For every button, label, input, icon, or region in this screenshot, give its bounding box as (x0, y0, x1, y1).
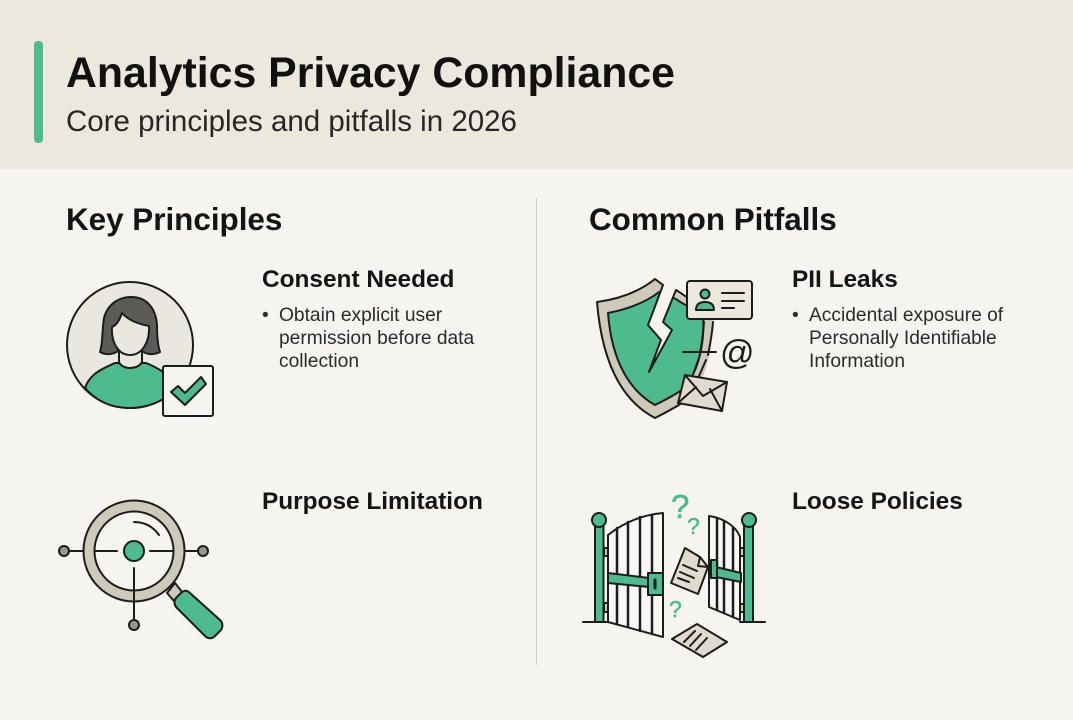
icon: broken shield with leaking data: @ (720, 334, 755, 372)
bullet text: consent: Obtain explicit user (279, 305, 442, 326)
bullet text: consent: • (262, 305, 269, 326)
title: Analytics Privacy Compliance (66, 49, 675, 97)
heading: loose policies: Loose Policies (792, 488, 963, 515)
bullet text: consent (262, 305, 474, 372)
icon: broken shield with leaking data (597, 279, 755, 418)
principle: consent needed (262, 266, 474, 372)
heading: common pitfalls: Common Pitfalls (589, 202, 837, 237)
bullet text: PII: Accidental exposure of (809, 305, 1003, 326)
heading: key principles: Key Principles (66, 202, 282, 237)
bullet text: PII: • (792, 305, 799, 326)
icon: open gate with questions and papers: ? (687, 513, 700, 539)
bullet text: consent: permission before data (279, 328, 474, 349)
header band (0, 0, 1073, 169)
heading: purpose limitation: Purpose Limitation (262, 488, 483, 515)
bullet text: PII: Personally Identifiable (809, 328, 997, 349)
icon: person with consent check (67, 282, 213, 416)
bullet text: consent: collection (279, 351, 359, 372)
subtitle: Core principles and pitfalls in 2026 (66, 105, 517, 138)
icon: open gate with questions and papers: ? (669, 596, 682, 622)
pitfall: PII leaks (792, 266, 1004, 372)
heading: consent needed: Consent Needed (262, 266, 454, 293)
bullet text: PII: Information (809, 351, 905, 372)
accent bar (34, 41, 43, 143)
icon: open gate with questions and papers (583, 488, 765, 657)
heading: PII leaks: PII Leaks (792, 266, 898, 293)
icon: open gate with questions and papers: ? (671, 488, 689, 525)
column divider (536, 198, 537, 665)
bullet text: PII (792, 305, 1004, 372)
icon: magnifier with target (59, 500, 222, 638)
